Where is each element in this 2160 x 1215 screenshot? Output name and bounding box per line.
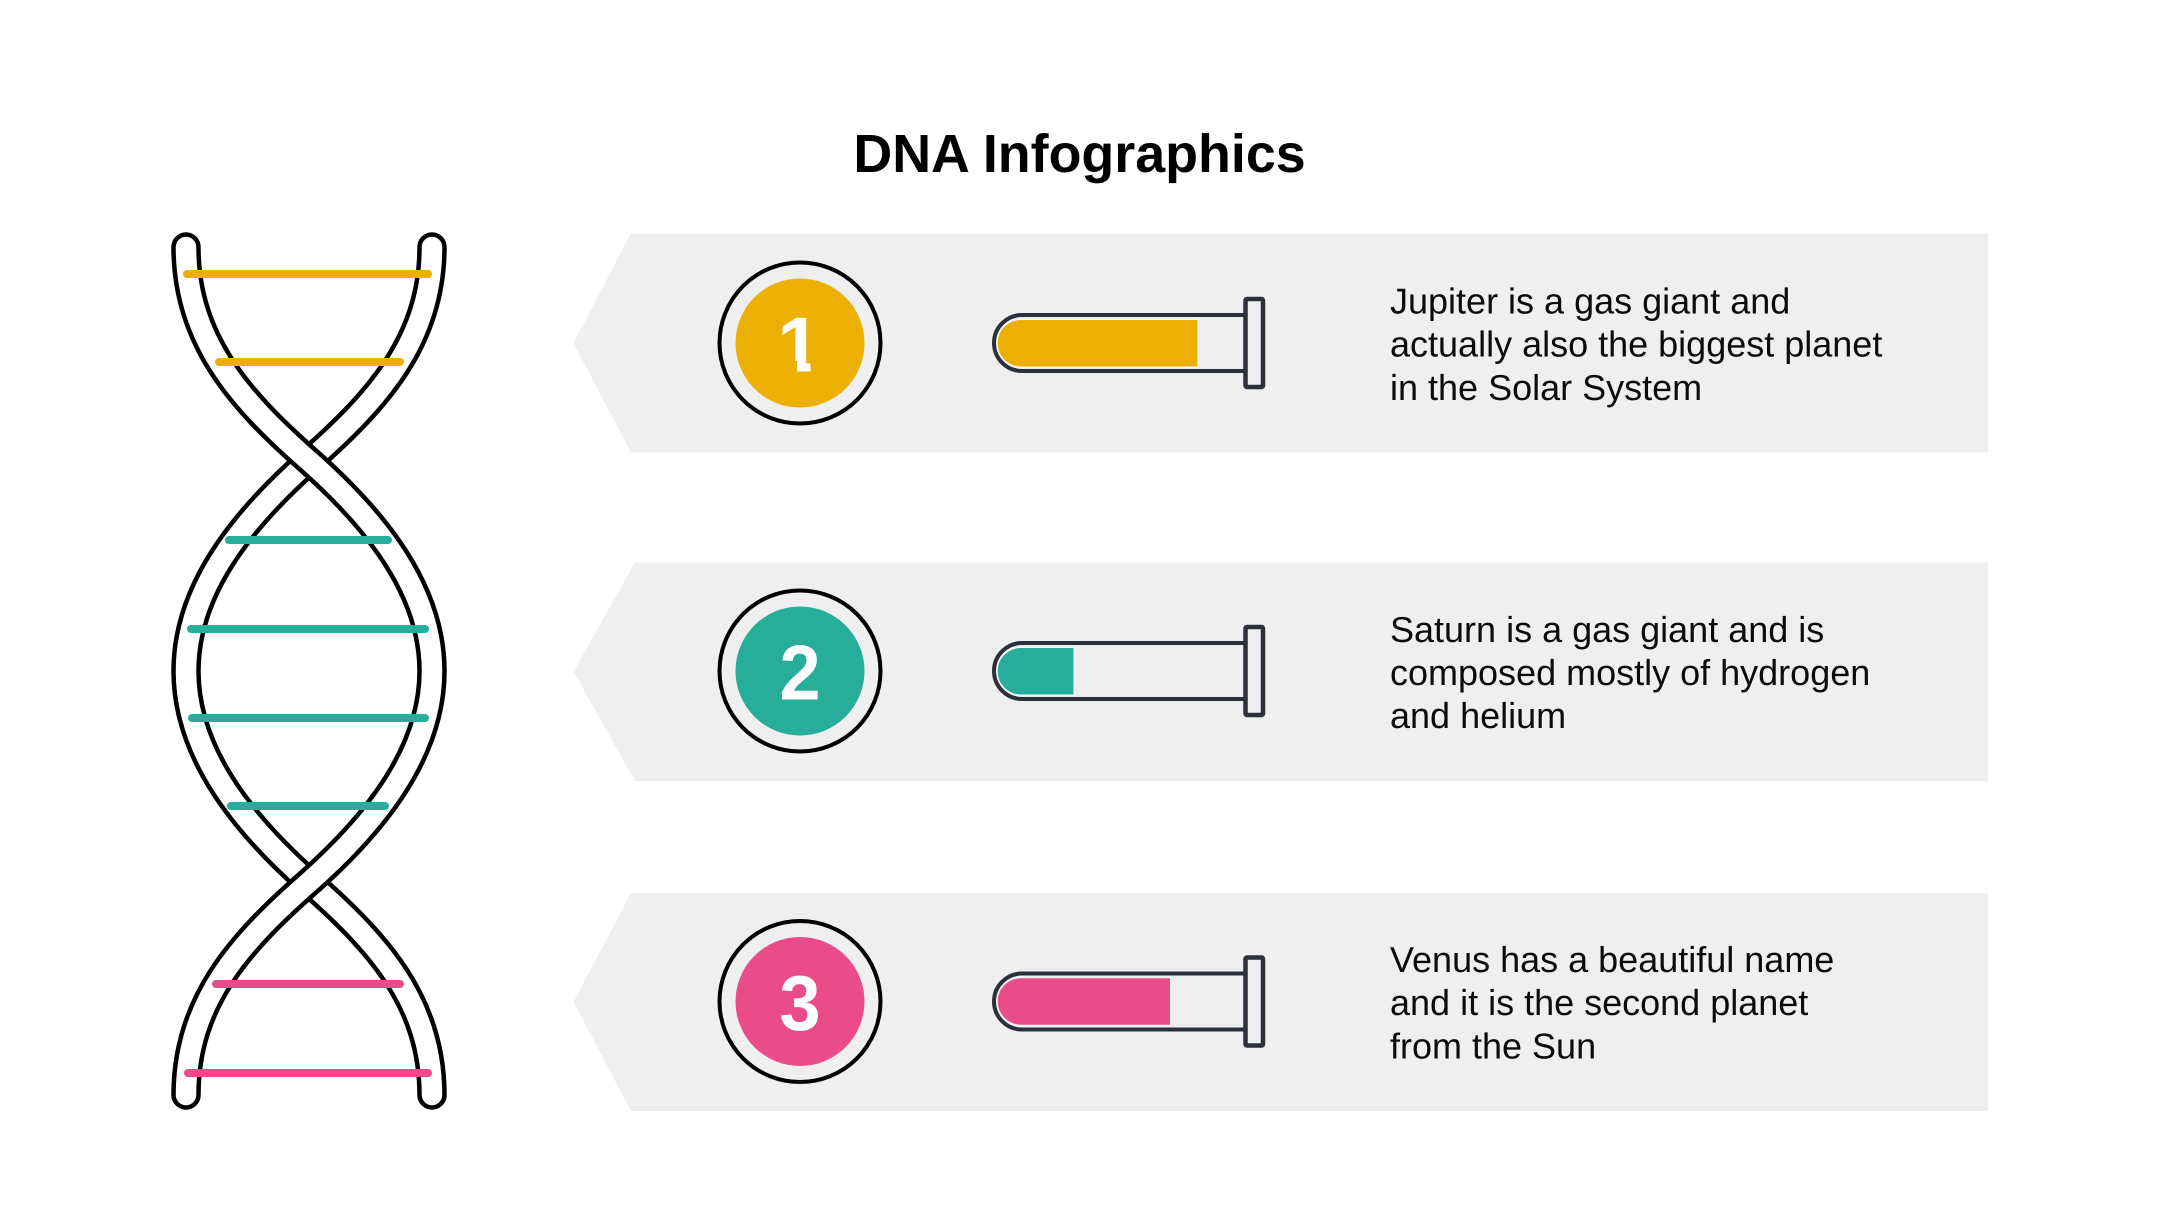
description 2: and helium <box>1390 695 1566 736</box>
panel background arrow <box>574 562 1988 781</box>
panel background arrow <box>574 234 1988 452</box>
description 2: Saturn is a gas giant and is <box>1390 609 1824 650</box>
panel: item 2 Saturn <box>574 562 1988 781</box>
panel: item 1 Jupiter <box>574 234 1988 452</box>
number badge 3: 3 <box>779 959 821 1047</box>
description 1: Jupiter is a gas giant and <box>1390 280 1790 322</box>
number badge 2: 2 <box>779 628 821 716</box>
test tube gauge 1 <box>994 299 1263 387</box>
number badge 1 <box>720 262 880 424</box>
panel background arrow <box>574 893 1988 1111</box>
yellow base pairs <box>187 274 428 362</box>
teal base pairs <box>191 540 425 806</box>
test tube gauge 2 <box>994 627 1263 715</box>
DNA double helix illustration <box>186 247 432 1095</box>
test tube gauge 3 <box>994 958 1263 1046</box>
number badge 2 <box>720 590 880 752</box>
description 1: in the Solar System <box>1390 367 1702 408</box>
description 1: actually also the biggest planet <box>1390 324 1882 365</box>
description 3: Venus has a beautiful name <box>1390 939 1834 980</box>
title: DNA Infographics <box>853 124 1306 184</box>
front strand <box>186 247 432 1095</box>
number badge 3 <box>720 921 880 1082</box>
number badge 1: 1 <box>777 301 821 389</box>
description 3: and it is the second planet <box>1390 982 1808 1023</box>
panel: item 3 Venus <box>574 893 1988 1111</box>
pink base pairs <box>188 984 428 1073</box>
description 2: composed mostly of hydrogen <box>1390 652 1870 693</box>
back strand <box>186 247 432 1095</box>
description 3: from the Sun <box>1390 1025 1596 1066</box>
